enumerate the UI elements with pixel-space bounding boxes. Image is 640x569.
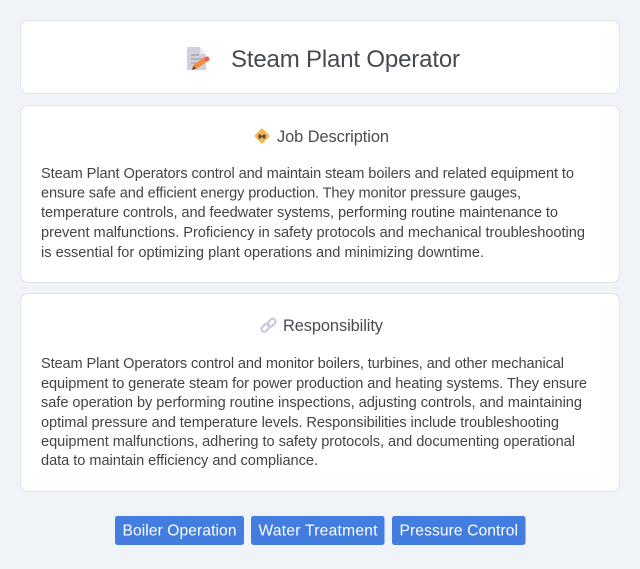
tag: pressure control: Pressure Control	[400, 522, 518, 540]
icon: orange diamond sign	[254, 128, 270, 144]
heading: responsibility: Responsibility	[283, 317, 384, 335]
text: responsibility body: Steam Plant Operators control and monitor boilers, turbines, and other mechanical	[41, 356, 564, 372]
heading: job description: Job Description	[277, 128, 389, 146]
text: responsibility body: equipment malfunctions, adhering to safety protocols, and documenting operational	[41, 434, 575, 450]
panel: job description	[20, 106, 620, 282]
tag: boiler operation: Boiler Operation	[122, 522, 236, 540]
text: responsibility body: data to maintain efficiency and compliance.	[41, 453, 318, 469]
text: job description body: Steam Plant Operators control and maintain steam boilers and related equipment to	[41, 166, 574, 182]
text: job description body: prevent malfunctions. Proficiency in safety protocols and mechanical troubleshooting	[41, 225, 585, 241]
text: job description body: ensure safe and efficient energy production. They monitor pressure gauges,	[41, 186, 521, 202]
tag: pressure control	[392, 516, 526, 545]
text: responsibility body	[41, 356, 587, 469]
text: responsibility body: optimal pressure and temperature levels. Responsibilities include troubleshooting	[41, 415, 559, 431]
text: job description body: is essential for optimizing plant operations and minimizing downtime.	[41, 245, 484, 261]
panel: responsibility	[20, 294, 620, 492]
tag: boiler operation	[115, 516, 244, 545]
tag: water treatment	[251, 516, 384, 545]
panel: title header	[20, 20, 620, 94]
icon: chain link	[260, 318, 277, 333]
icon: document with pencil	[187, 47, 210, 70]
text: responsibility body: equipment to generate steam for power production and heating systems. They ensure	[41, 376, 587, 392]
title: Steam Plant Operator	[231, 46, 460, 73]
tag: water treatment: Water Treatment	[258, 522, 378, 540]
text: job description body	[41, 166, 585, 261]
text: job description body: temperature controls, and feedwater systems, performing routine maintenance to	[41, 205, 558, 221]
text: responsibility body: safe operation by performing routine inspections, adjusting controls, and maintaining	[41, 395, 582, 411]
